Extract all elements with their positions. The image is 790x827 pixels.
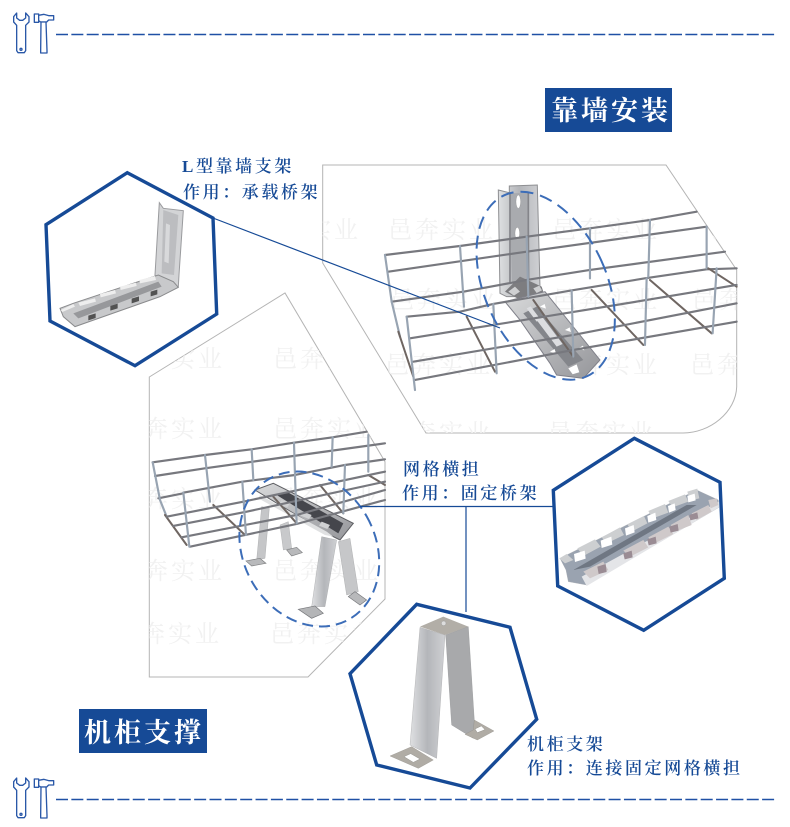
watermark rows: 奔实业 [280, 217, 361, 244]
hexagon: grid crossbar [553, 438, 724, 630]
title: wall mount: 靠墙安装 [551, 95, 671, 126]
label: grid crossbar [402, 459, 539, 503]
bottom header icons [14, 778, 54, 818]
hexagon: cabinet stand [350, 604, 537, 788]
watermark rows [322, 218, 737, 433]
stand part [390, 617, 494, 768]
label: L bracket: L型靠墙支架 [182, 156, 294, 176]
watermark rows: 邑奔实业 [552, 217, 660, 244]
icon: wrench [14, 778, 29, 818]
watermark rows: 邑奔实业 [117, 346, 225, 373]
watermark rows: 邑奔实业 [117, 416, 225, 443]
watermark rows: 邑奔实业 [273, 346, 381, 373]
top dashed divider [56, 34, 776, 36]
watermark rows: 邑奔实业 [385, 352, 493, 379]
connector: crossbar and stand [360, 506, 554, 612]
label: cabinet stand: 机柜支架 [527, 734, 605, 754]
label: cabinet stand: 作用：连接固定网格横担 [527, 758, 743, 778]
panel: wall mount photo [322, 164, 738, 434]
watermark rows: 邑奔实业 [273, 416, 381, 443]
title: cabinet support [79, 709, 207, 753]
watermark rows: 邑奔实业 [552, 352, 660, 379]
watermark rows [149, 347, 377, 644]
bottom dashed divider [56, 798, 776, 800]
label: L bracket [182, 156, 320, 202]
watermark rows: 邑奔实业 [385, 420, 493, 447]
dashed highlight ellipse [449, 170, 642, 402]
hexagon: L-shaped bracket [46, 173, 217, 366]
watermark rows: 邑奔实业 [388, 217, 496, 244]
watermark rows: 邑奔实业 [273, 486, 381, 513]
support legs and wire basket [153, 432, 385, 618]
crossbar part [559, 489, 719, 586]
watermark rows: 邑奔实业 [273, 558, 381, 585]
icon: hammer [34, 14, 54, 53]
watermark rows: 邑奔实业 [552, 287, 660, 314]
icon: hammer [34, 779, 54, 818]
bracket and wire basket [385, 185, 737, 390]
icon: wrench [14, 13, 29, 53]
label: L bracket: 作用：承载桥架 [183, 182, 320, 202]
watermark rows: 邑奔实业 [117, 558, 225, 585]
watermark rows: 邑奔实业 [390, 287, 498, 314]
dashed highlight ellipse [212, 446, 407, 652]
watermark rows: 邑奔实业 [114, 621, 222, 648]
top header icons [14, 13, 54, 53]
label: cabinet stand [527, 734, 743, 778]
title: wall mount [545, 88, 672, 132]
watermark rows: 邑奔实业 [270, 621, 378, 648]
L bracket part [60, 203, 183, 327]
label: grid crossbar: 作用：固定桥架 [402, 483, 539, 503]
label: grid crossbar: 网格横担 [403, 459, 481, 479]
title: cabinet support: 机柜支撑 [84, 717, 204, 748]
connector: L bracket to photo [213, 218, 500, 328]
watermark rows: 邑奔实业 [548, 420, 656, 447]
watermark rows: 邑奔实业 [117, 486, 225, 513]
panel: cabinet support photo [148, 292, 386, 678]
